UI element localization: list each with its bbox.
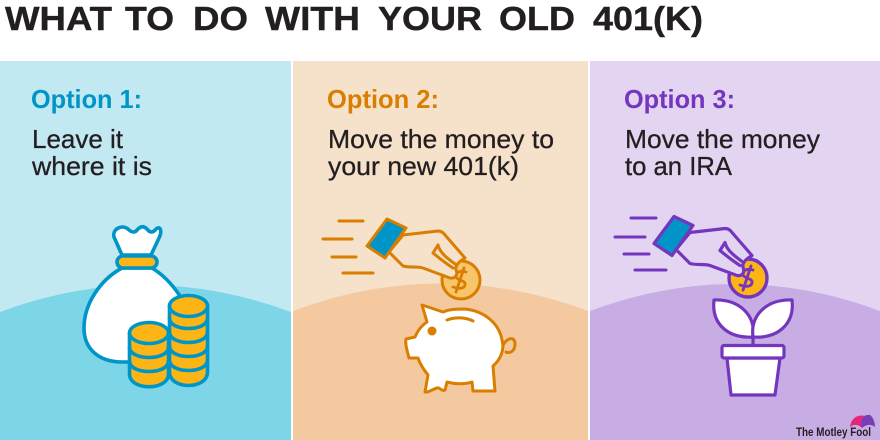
icon: speed lines xyxy=(615,218,666,270)
heading: option 2: Option 2: xyxy=(327,84,439,114)
icon: money bag with coins xyxy=(84,227,208,387)
heading: option 1: Option 1: xyxy=(31,84,142,114)
text: option 3 description: to an IRA xyxy=(625,151,733,181)
icon: speed lines xyxy=(323,221,373,273)
text: option 2 description: Move the money to xyxy=(328,124,554,154)
title: WHAT xyxy=(5,0,112,37)
icon: short coin stack xyxy=(130,322,168,387)
title: DO xyxy=(193,0,248,37)
icon: tall coin stack xyxy=(170,296,208,386)
title: OLD xyxy=(499,0,575,37)
icon: coin xyxy=(729,259,767,297)
icon: hand with cuff xyxy=(367,219,465,278)
heading: option 3: Option 3: xyxy=(624,84,735,114)
panel: option 1 xyxy=(0,61,291,440)
logo: The Motley Fool xyxy=(796,415,875,439)
panel: option 2 xyxy=(293,61,588,440)
text: option 1 description: where it is xyxy=(31,151,152,181)
icon: coin xyxy=(442,261,480,299)
title: WITH xyxy=(265,0,360,37)
title: YOUR xyxy=(378,0,482,37)
icon: hand with cuff xyxy=(654,216,752,276)
text: option 1 description: Leave it xyxy=(32,124,124,154)
panel: option 3 xyxy=(590,61,880,440)
text: option 3 description: Move the money xyxy=(625,124,820,154)
title: 401(K) xyxy=(593,0,703,37)
icon: piggy bank xyxy=(406,305,515,392)
icon: potted plant xyxy=(714,300,792,395)
text: option 2 description: your new 401(k) xyxy=(328,151,519,181)
title: TO xyxy=(125,0,174,37)
icon: jester hat xyxy=(850,415,875,428)
